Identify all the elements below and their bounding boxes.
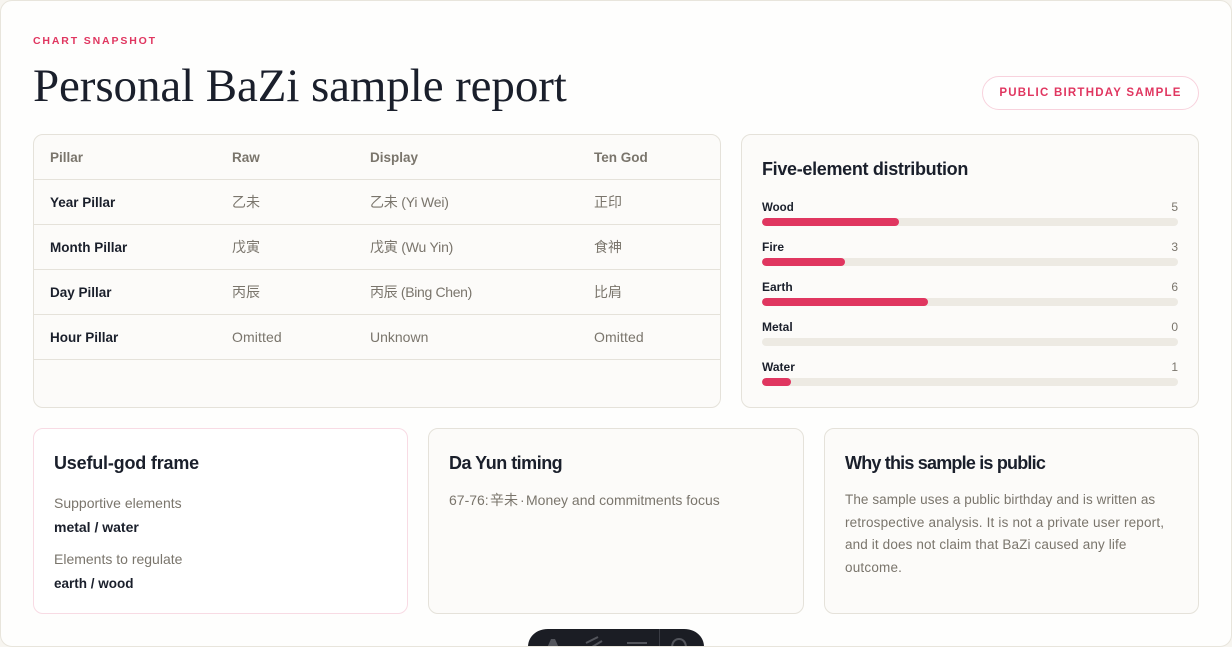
row: month pillar: 戊寅 (Wu Yin) [370, 239, 453, 255]
bar: metal [762, 320, 1178, 346]
explanation: The sample uses a public birthday and is written as [845, 492, 1155, 507]
row: year pillar [50, 194, 622, 210]
panel: pillar table [33, 134, 721, 408]
panel: useful-god frame [33, 428, 408, 614]
row: year pillar: 正印 [594, 194, 622, 210]
elements to regulate: earth / wood [54, 576, 134, 591]
row: hour pillar: Unknown [370, 329, 428, 345]
bar: wood: Wood [762, 202, 794, 214]
bar: fire: 3 [1171, 240, 1178, 254]
row: day pillar: 比肩 [594, 284, 622, 300]
row: day pillar: 丙辰 [232, 284, 260, 300]
elements to regulate: Elements to regulate [54, 551, 182, 567]
panel: da yun timing [428, 428, 804, 614]
bar: earth: 6 [1171, 280, 1178, 294]
row: hour pillar: Omitted [594, 329, 644, 345]
heading: Useful-god frame [54, 453, 199, 473]
heading: Five-element distribution [762, 159, 968, 179]
bar: metal: 0 [1171, 320, 1178, 334]
table header: Raw [232, 150, 260, 165]
table header: Display [370, 150, 418, 165]
timing text: 67-76: [449, 492, 489, 508]
badge: public birthday sample [982, 76, 1199, 110]
panel: why this sample is public [824, 428, 1199, 614]
bar: wood [762, 200, 1178, 226]
row: day pillar: Day Pillar [50, 285, 112, 300]
row: year pillar: 乙未 (Yi Wei) [370, 194, 449, 210]
timing text: · [520, 492, 525, 508]
row: month pillar [50, 239, 622, 255]
timing text: Money and commitments focus [526, 492, 720, 508]
row: year pillar: 乙未 [232, 194, 260, 210]
bar: fire [762, 240, 1178, 266]
row: day pillar [50, 284, 622, 300]
row: hour pillar [50, 329, 644, 345]
elements to regulate [54, 551, 182, 591]
row: month pillar: 食神 [594, 239, 622, 255]
bar: fire: Fire [762, 240, 784, 254]
title: Personal BaZi sample report [33, 60, 567, 112]
row: hour pillar: Omitted [232, 329, 282, 345]
supportive elements: metal / water [54, 519, 139, 535]
explanation: outcome. [845, 560, 902, 575]
row: day pillar: 丙辰 (Bing Chen) [370, 284, 472, 300]
supportive elements [54, 495, 182, 535]
table header [50, 150, 648, 165]
supportive elements: Supportive elements [54, 495, 182, 511]
badge: public birthday sample: PUBLIC BIRTHDAY SAMPLE [999, 87, 1182, 99]
bar: wood: 5 [1171, 200, 1178, 214]
bar: water: Water [762, 360, 795, 374]
bar: water: 1 [1171, 360, 1178, 374]
row: month pillar: Month Pillar [50, 240, 127, 255]
explanation: and it does not claim that BaZi caused any life [845, 537, 1127, 552]
row: month pillar: 戊寅 [232, 239, 260, 255]
table header: Ten God [594, 150, 648, 165]
bar: metal: Metal [762, 320, 793, 334]
bar: water [762, 360, 1178, 386]
heading: Why this sample is public [845, 453, 1045, 473]
heading: Da Yun timing [449, 453, 562, 473]
panel: five-element distribution [741, 134, 1199, 408]
row: year pillar: Year Pillar [50, 195, 115, 210]
eyebrow label: CHART SNAPSHOT [33, 35, 157, 47]
bar: earth [762, 280, 1178, 306]
bar: earth: Earth [762, 280, 793, 294]
floating toolbar [528, 629, 704, 646]
table header: Pillar [50, 150, 83, 165]
explanation [845, 492, 1164, 575]
row: hour pillar: Hour Pillar [50, 330, 118, 345]
explanation: retrospective analysis. It is not a private user report, [845, 515, 1164, 530]
timing text: 辛未 [490, 492, 518, 508]
